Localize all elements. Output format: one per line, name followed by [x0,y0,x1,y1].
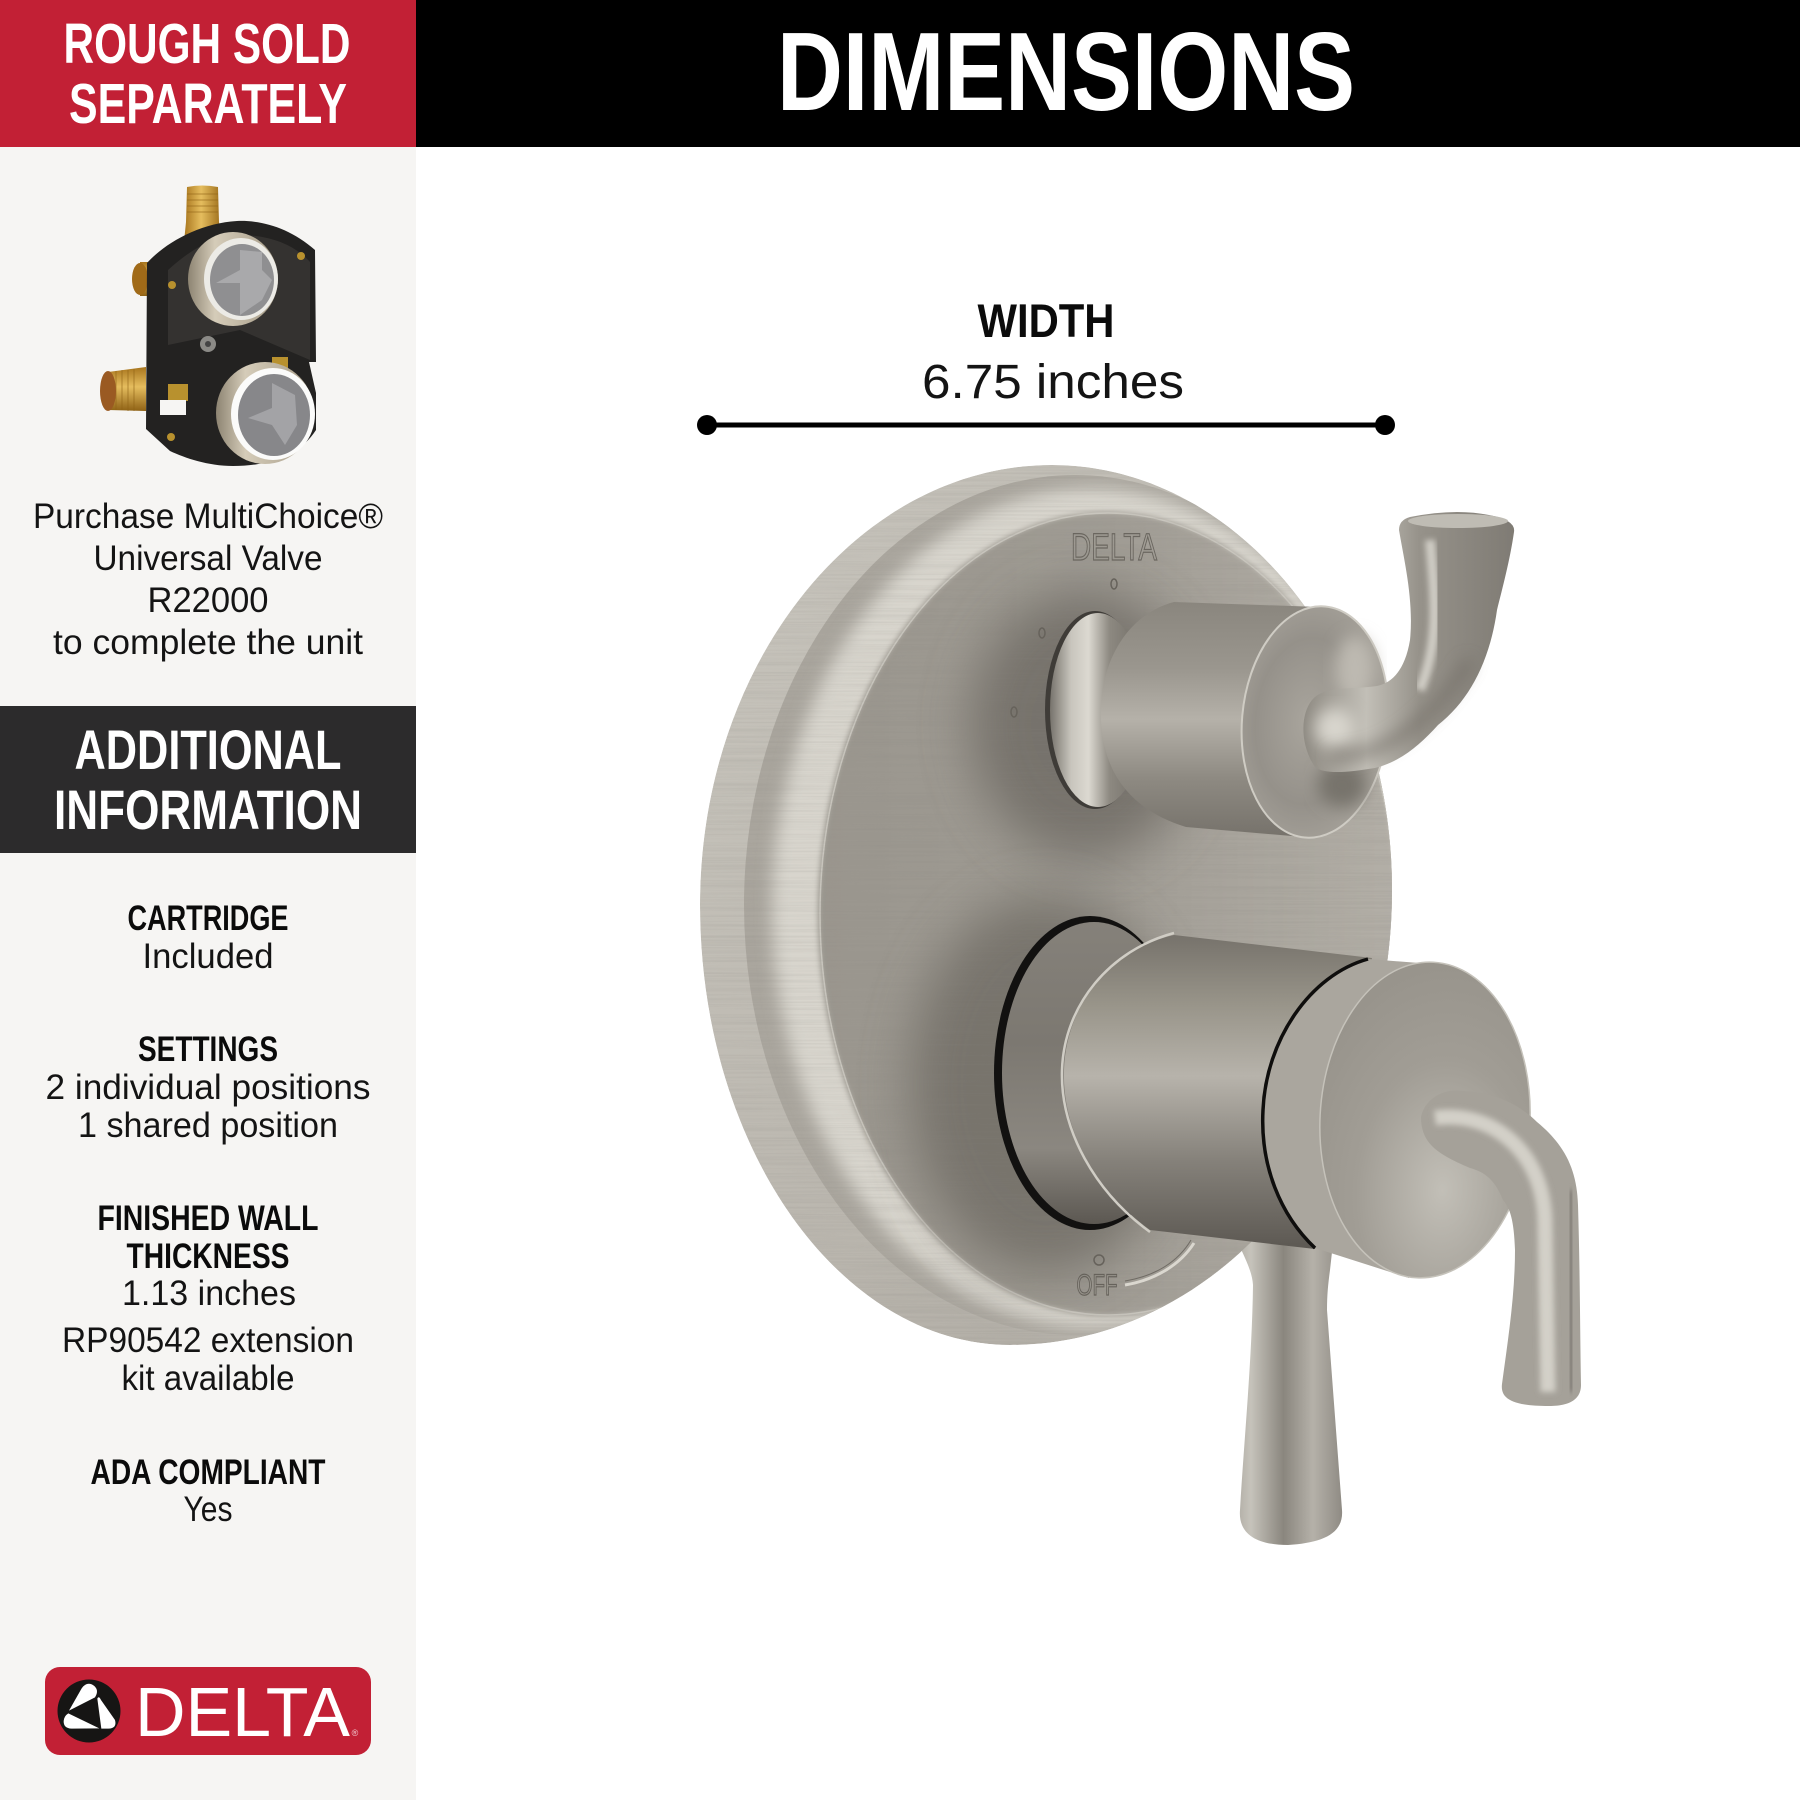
plate engraving: off marker: OFF [1076,1269,1118,1302]
spec: cartridge: CARTRIDGE [128,899,288,938]
upper lever [1303,512,1514,772]
spec: ADA compliant: ADA COMPLIANT [90,1453,326,1492]
wall plate [700,465,1412,1345]
product: shower valve trim [700,465,1581,1545]
spec: settings: 1 shared position [78,1106,338,1145]
spec: cartridge [128,899,288,976]
dimension line: width [697,415,1395,435]
plate engraving: off marker [1076,1240,1194,1302]
banner: rough sold separately: ROUGH SOLD [64,12,350,76]
logo: Delta: ® [352,1728,359,1738]
banner: rough sold separately: SEPARATELY [69,72,347,136]
spec: settings [46,1030,370,1145]
banner: additional information: INFORMATION [54,778,362,841]
upper knob [1045,600,1398,844]
header: dimensions: DIMENSIONS [777,10,1355,134]
text: purchase note: Universal Valve [94,539,322,578]
spec: settings: 2 individual positions [46,1068,370,1107]
plate markers [1011,579,1117,717]
header: dimensions [416,0,1800,147]
sidebar panel [0,0,416,1800]
label: width: WIDTH [978,294,1114,347]
lower down lever (behind the knob) [1225,1215,1342,1545]
banner: rough sold separately [0,0,416,147]
text: purchase note: Purchase MultiChoice® [33,497,383,536]
lower knob [994,916,1538,1283]
spec: finished wall thickness: THICKNESS [126,1237,290,1276]
banner: additional information [0,706,416,853]
image: MultiChoice universal valve [100,186,316,466]
spec: settings: SETTINGS [138,1030,278,1069]
spec: cartridge: Included [142,937,274,976]
banner: additional information: ADDITIONAL [74,718,342,781]
spec: finished wall thickness: 1.13 inches [122,1274,296,1313]
text: purchase note: to complete the unit [53,623,363,662]
spec: ADA compliant: Yes [184,1490,232,1529]
plate engraving: brand: DELTA [1071,527,1157,569]
text: purchase note [33,497,383,662]
spec: finished wall thickness: FINISHED WALL [98,1199,318,1238]
label: width [922,294,1184,409]
text: purchase note: R22000 [148,581,268,620]
lower side lever [1421,1090,1581,1406]
logo: Delta [45,1667,371,1755]
label: width: 6.75 inches [922,356,1184,409]
spec: finished wall thickness: RP90542 extension [62,1321,354,1360]
spec: ADA compliant [90,1453,326,1529]
spec: finished wall thickness: kit available [122,1359,294,1398]
spec: finished wall thickness [62,1199,354,1398]
logo: Delta: DELTA [135,1673,350,1751]
